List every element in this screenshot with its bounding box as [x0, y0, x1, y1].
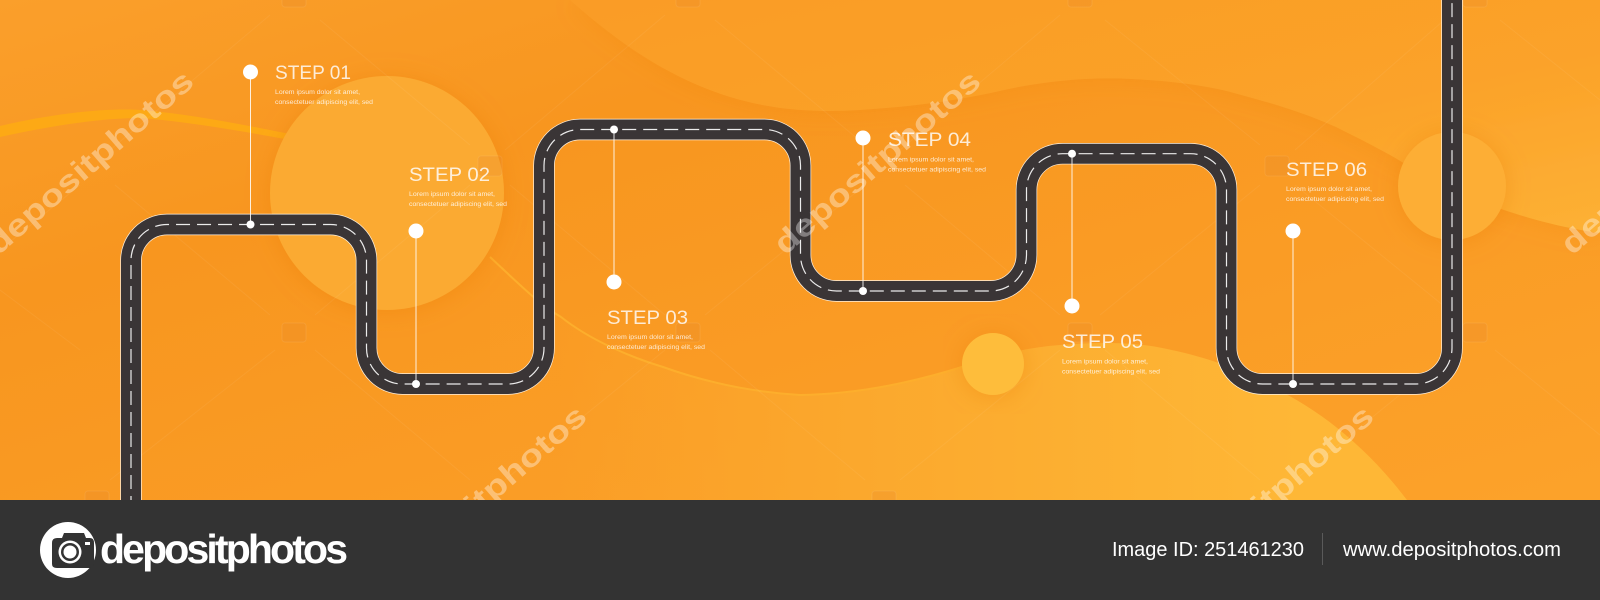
step 03: consectetuer adipiscing elit, sed: [607, 344, 705, 351]
step 03: [606, 126, 705, 351]
icon: camera logo: [40, 522, 96, 578]
step 06: Lorem ipsum dolor sit amet,: [1286, 186, 1372, 193]
step 01: [243, 62, 373, 228]
step 02: [408, 164, 507, 388]
watermarks: depositphotos: [767, 63, 987, 261]
step 05: [1062, 150, 1160, 376]
step 03: Lorem ipsum dolor sit amet,: [607, 334, 693, 341]
circle: yellow: [962, 333, 1024, 395]
watermark lattice: [0, 15, 1600, 480]
step 06: consectetuer adipiscing elit, sed: [1286, 196, 1384, 203]
step 03: STEP 03: [607, 307, 688, 329]
step 01: Lorem ipsum dolor sit amet,: [275, 89, 360, 96]
circle: large: [270, 76, 504, 310]
decorative arc: center: [490, 257, 965, 395]
watermark camera icons: [85, 0, 1487, 510]
watermarks: depositphotos: [1160, 398, 1380, 596]
image id: Image ID: 251461230: [1112, 539, 1304, 561]
step 02: consectetuer adipiscing elit, sed: [409, 201, 507, 208]
step 04: consectetuer adipiscing elit, sed: [888, 166, 986, 174]
step 01: STEP 01: [275, 62, 351, 84]
step 02: Lorem ipsum dolor sit amet,: [409, 191, 495, 198]
watermarks: depositphotos: [373, 398, 593, 596]
step 06: STEP 06: [1286, 159, 1367, 181]
step 05: STEP 05: [1062, 331, 1143, 353]
website url: www.depositphotos.com: [1342, 539, 1561, 561]
logo wordmark: depositphotos: [100, 526, 348, 572]
step 05: consectetuer adipiscing elit, sed: [1062, 368, 1160, 376]
step 06: [1286, 159, 1384, 388]
step 04: STEP 04: [888, 129, 971, 151]
step 02: STEP 02: [409, 164, 490, 186]
step 04: [856, 129, 986, 295]
step 01: consectetuer adipiscing elit, sed: [275, 99, 373, 106]
footer bar: [0, 500, 1600, 600]
circle: small right: [1398, 132, 1506, 240]
step 05: Lorem ipsum dolor sit amet,: [1062, 358, 1148, 366]
decorative arc: top left: [0, 110, 290, 139]
road: [131, 0, 1452, 510]
step 04: Lorem ipsum dolor sit amet,: [888, 156, 974, 164]
watermarks: [0, 75, 1600, 500]
